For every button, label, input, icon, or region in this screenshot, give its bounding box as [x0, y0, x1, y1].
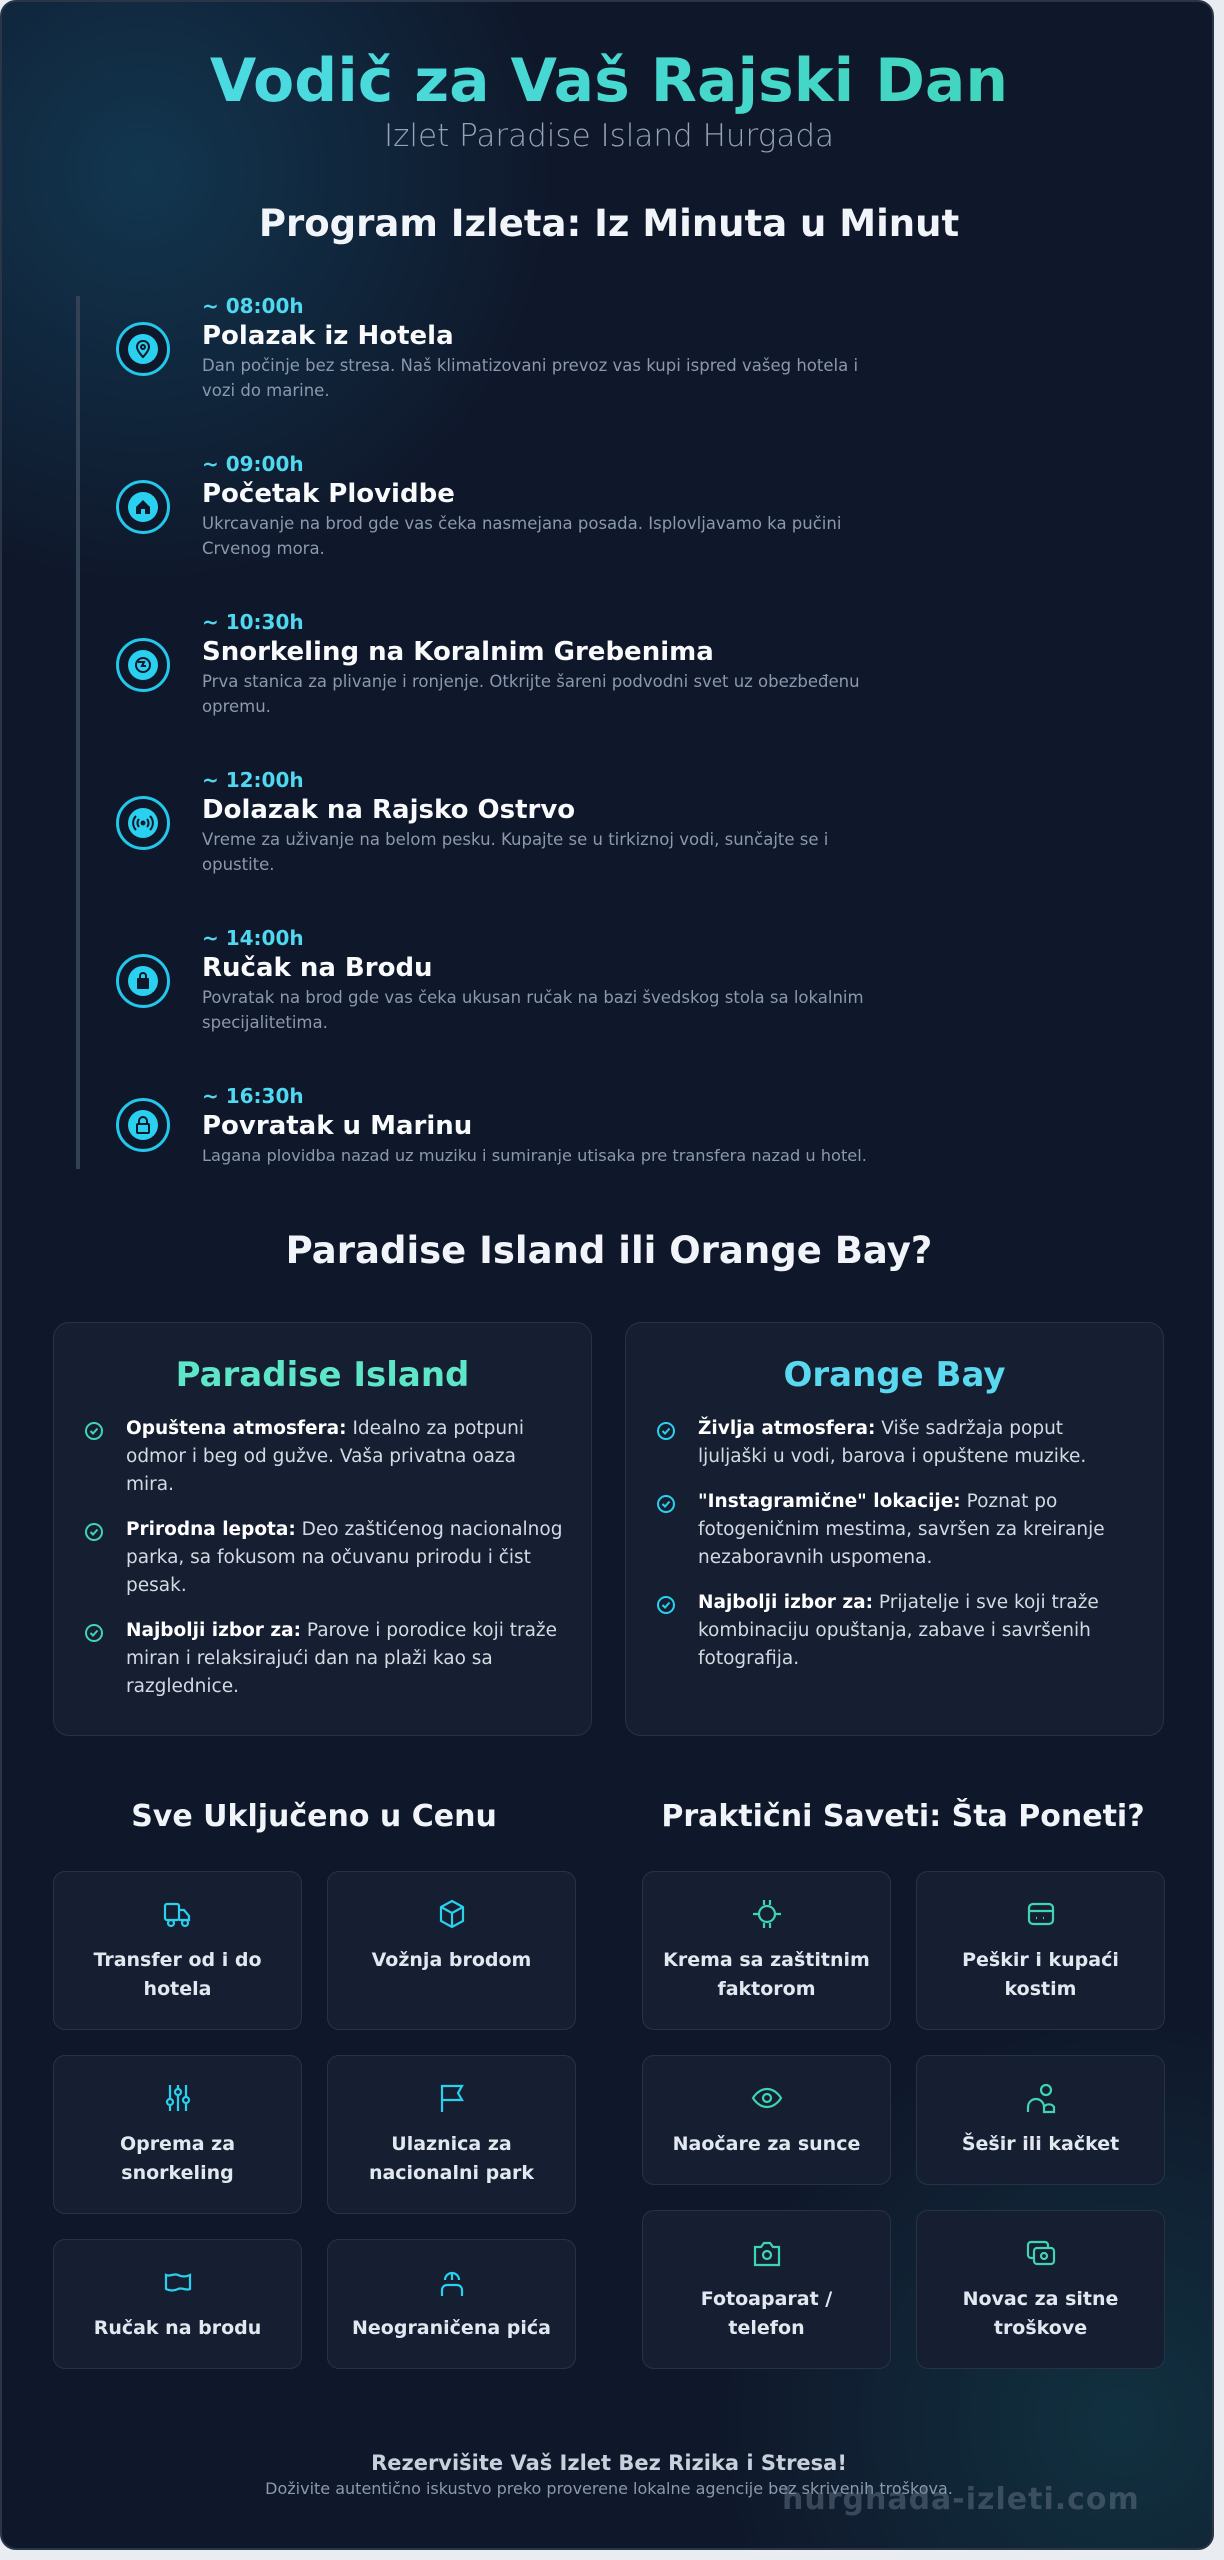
- timeline item 5: [116, 926, 864, 1032]
- timeline item 6: ~ 16:30h: [202, 1084, 304, 1108]
- timeline item 3: [116, 610, 860, 716]
- tile: park: Ulaznica za nacionalni park: [369, 2133, 534, 2184]
- timeline item 4: ~ 12:00h: [202, 768, 304, 792]
- item: lokacije: [657, 1491, 1105, 1568]
- timeline item 4: Vreme za uživanje na belom pesku. Kupajte se u tirkiznoj vodi, sunčajte se i opustite.: [202, 830, 828, 874]
- icon: pin: [116, 322, 170, 376]
- panel: Orange Bay: Orange Bay: [783, 1355, 1006, 1395]
- item: izbor: razglednice.: [126, 1676, 239, 1697]
- timeline item 5: Ručak na Brodu: [202, 953, 433, 983]
- timeline item 1: Dan počinje bez stresa. Naš klimatizovani prevoz vas kupi ispred vašeg hotela i vozi do marine.: [202, 356, 858, 400]
- timeline item 2: Ukrcavanje na brod gde vas čeka nasmejana posada. Isplovljavamo ka pučini Crvenog mora.: [202, 514, 841, 558]
- item: atmosfera: Opuštena atmosfera: Idealno za potpuni: [126, 1418, 524, 1439]
- item: atmosfera: Življa atmosfera: Više sadržaja poput: [698, 1418, 1063, 1439]
- item: lepota: [85, 1519, 562, 1596]
- tile: lunch: [53, 2239, 302, 2369]
- tile: sunglasses: Naočare za sunce: [673, 2133, 860, 2155]
- item: lokacije: "Instagramične" lokacije: Poznat po: [698, 1491, 1057, 1512]
- timeline item 6: Lagana plovidba nazad uz muziku i sumiranje utisaka pre transfera nazad u hotel.: [202, 1146, 867, 1165]
- tile: hat: [916, 2055, 1165, 2185]
- panel: Paradise Island: Paradise Island: [176, 1355, 469, 1395]
- tile: sunscreen: [642, 1871, 891, 2030]
- title: [2, 46, 1216, 116]
- tile: boat: Vožnja brodom: [372, 1949, 531, 1971]
- timeline item 4: Dolazak na Rajsko Ostrvo: [202, 795, 575, 825]
- timeline item 3: Snorkeling na Koralnim Grebenima: [202, 637, 714, 667]
- watermark: hurghada-izleti.com: [782, 2482, 1140, 2517]
- timeline line: [76, 296, 80, 1169]
- tile: camera: Fotoaparat / telefon: [701, 2288, 832, 2339]
- tile: transfer: Transfer od i do hotela: [93, 1949, 262, 2000]
- item: lepota: pesak.: [126, 1575, 187, 1596]
- tile: camera: [642, 2210, 891, 2369]
- item: atmosfera: odmor i beg od gužve. Vaša privatna oaza: [126, 1446, 516, 1467]
- timeline item 4: [116, 768, 828, 874]
- timeline item 2: ~ 09:00h: [202, 452, 304, 476]
- icon: bag: [116, 954, 170, 1008]
- tile: transfer: [53, 1871, 302, 2030]
- timeline item 6: Povratak u Marinu: [202, 1111, 472, 1141]
- heading: included: Sve Uključeno u Cenu: [131, 1799, 497, 1834]
- tile: towel: [916, 1871, 1165, 2030]
- footer: Rezervišite Vaš Izlet Bez Rizika i Stresa!: [371, 2451, 847, 2475]
- panel: Orange Bay: [625, 1322, 1164, 1736]
- icon: globe: [116, 638, 170, 692]
- item: lokacije: nezaboravnih uspomena.: [698, 1547, 932, 1568]
- icon: home: [116, 480, 170, 534]
- footer: [265, 2451, 953, 2498]
- timeline item 3: ~ 10:30h: [202, 610, 304, 634]
- item: izbor: kombinaciju opuštanja, zabave i savršenih: [698, 1620, 1091, 1641]
- tile: drinks: [327, 2239, 576, 2369]
- tile: towel: Peškir i kupaći kostim: [962, 1949, 1119, 2000]
- timeline item 5: ~ 14:00h: [202, 926, 304, 950]
- timeline item 5: Povratak na brod gde vas čeka ukusan ručak na bazi švedskog stola sa lokalnim specijalitetima.: [202, 988, 864, 1032]
- timeline item 3: Prva stanica za plivanje i ronjenje. Otkrijte šareni podvodni svet uz obezbeđenu opremu.: [202, 672, 860, 716]
- item: izbor: miran i relaksirajući dan na plaži kao sa: [126, 1648, 493, 1669]
- timeline item 1: ~ 08:00h: [202, 294, 304, 318]
- item: izbor: fotografija.: [698, 1648, 799, 1669]
- tile: money: Novac za sitne troškove: [963, 2288, 1118, 2339]
- item: lepota: parka, sa fokusom na očuvanu prirodu i čist: [126, 1547, 531, 1568]
- item: atmosfera: [657, 1416, 1086, 1467]
- timeline item 6: [116, 1084, 867, 1165]
- heading: tips: Praktični Saveti: Šta Poneti?: [661, 1799, 1145, 1834]
- title: Vodič za Vaš Rajski Dan: [210, 46, 1008, 116]
- item: lokacije: fotogeničnim mestima, savršen za kreiranje: [698, 1519, 1105, 1540]
- tile: sunglasses: [642, 2055, 891, 2185]
- item: atmosfera: mira.: [126, 1474, 174, 1495]
- tile: money: [916, 2210, 1165, 2369]
- icon: lock: [116, 1098, 170, 1152]
- tile: sunscreen: Krema sa zaštitnim faktorom: [663, 1949, 870, 2000]
- subtitle: Izlet Paradise Island Hurgada: [384, 118, 834, 154]
- item: izbor: Najbolji izbor za: Parove i porodice koji traže: [126, 1620, 557, 1641]
- tile: snorkel: [53, 2055, 302, 2214]
- tile: park: [327, 2055, 576, 2214]
- timeline item 1: Polazak iz Hotela: [202, 321, 454, 351]
- timeline item 2: Početak Plovidbe: [202, 479, 455, 509]
- tile: lunch: Ručak na brodu: [94, 2317, 261, 2339]
- icon: signal: [116, 796, 170, 850]
- item: izbor: Najbolji izbor za: Prijatelje i sve koji traže: [698, 1592, 1099, 1613]
- panel: Paradise Island: [53, 1322, 592, 1736]
- footer: Doživite autentično iskustvo preko proverene lokalne agencije bez skrivenih troškova.: [265, 2479, 953, 2498]
- item: lepota: Prirodna lepota: Deo zaštićenog nacionalnog: [126, 1519, 562, 1540]
- timeline item 1: [116, 294, 858, 400]
- item: atmosfera: [85, 1418, 524, 1495]
- tile: hat: Šešir ili kačket: [962, 2133, 1119, 2155]
- heading: comparison: Paradise Island ili Orange Bay?: [286, 1229, 932, 1272]
- heading: program: Program Izleta: Iz Minuta u Minut: [259, 202, 959, 245]
- item: izbor: [85, 1620, 557, 1697]
- item: izbor: [657, 1592, 1099, 1669]
- tile: boat: [327, 1871, 576, 2030]
- timeline item 2: [116, 452, 841, 558]
- tile: drinks: Neograničena pića: [352, 2317, 551, 2339]
- tile: snorkel: Oprema za snorkeling: [120, 2133, 235, 2184]
- item: atmosfera: ljuljaški u vodi, barova i opuštene muzike.: [698, 1446, 1086, 1467]
